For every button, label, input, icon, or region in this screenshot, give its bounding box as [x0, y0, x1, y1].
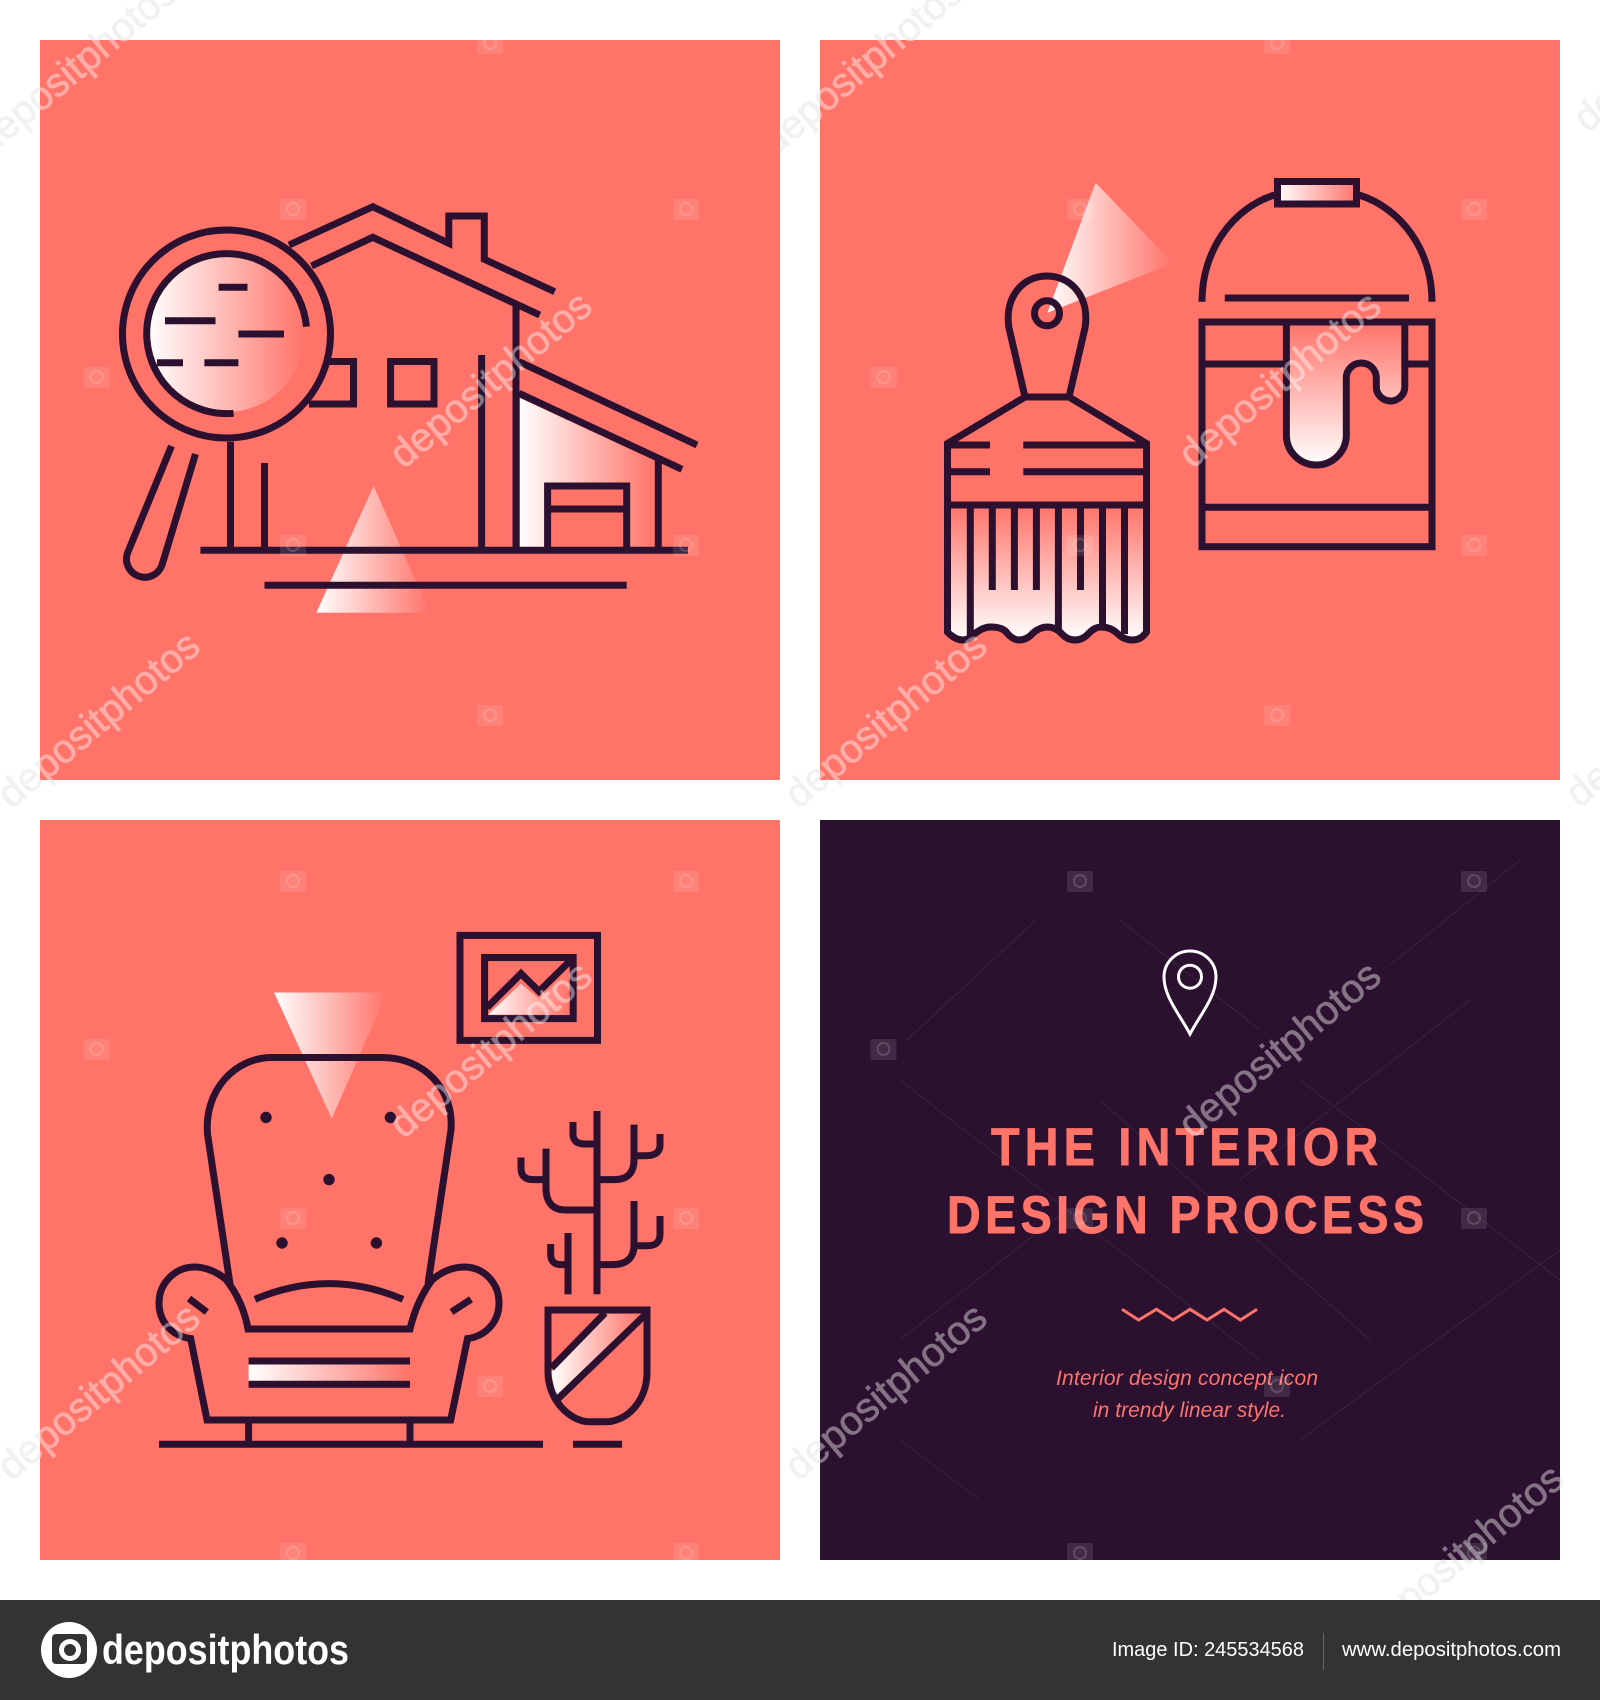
subtitle line one: Interior design concept icon [1056, 1367, 1318, 1390]
footer bar [0, 1600, 1600, 1700]
faint watermark on white margins: depositphotos [776, 1295, 995, 1489]
panel: paint tools [820, 40, 1560, 780]
image id: Image ID: 245534568 [1112, 1639, 1304, 1661]
subtitle line two: in trendy linear style. [1093, 1399, 1286, 1422]
panel: house inspection [40, 40, 780, 780]
icon: armchair [159, 1058, 499, 1444]
floor lines [159, 1441, 622, 1448]
icon: cactus plant [521, 1111, 660, 1422]
website: www.depositphotos.com [1341, 1639, 1561, 1661]
title line two: DESIGN PROCESS [947, 1185, 1424, 1245]
watermark pattern: depositphotos [1353, 1456, 1572, 1650]
icon: magnifying glass [122, 230, 330, 577]
icon: location pin [1164, 951, 1216, 1034]
icon: paint brush [948, 276, 1146, 640]
icon: paint bucket [1202, 182, 1432, 547]
ground lines [200, 550, 688, 585]
zigzag divider [1122, 1309, 1257, 1320]
logo wordmark: depositphotos [102, 1626, 349, 1673]
watermark pattern: depositphotos [776, 1295, 995, 1489]
decorative triangle [316, 486, 430, 613]
watermark pattern: depositphotos [381, 283, 600, 477]
watermark pattern: depositphotos [1170, 283, 1389, 477]
watermark pattern: depositphotos [381, 953, 600, 1147]
icon: framed picture [460, 935, 598, 1040]
faint watermark on white margins: depositphotos [776, 623, 995, 817]
logo icon [41, 1622, 97, 1678]
panel: title card [820, 820, 1560, 1560]
panel: living room [40, 820, 780, 1560]
icon: house [230, 207, 697, 550]
decorative triangle [1047, 183, 1173, 313]
watermark pattern: depositphotos [1170, 953, 1389, 1147]
decorative triangle [274, 992, 387, 1119]
title: THE INTERIOR [991, 1117, 1378, 1177]
faint watermark on white margins: depositphotos [1353, 1456, 1572, 1650]
watermark pattern: depositphotos [776, 623, 995, 817]
